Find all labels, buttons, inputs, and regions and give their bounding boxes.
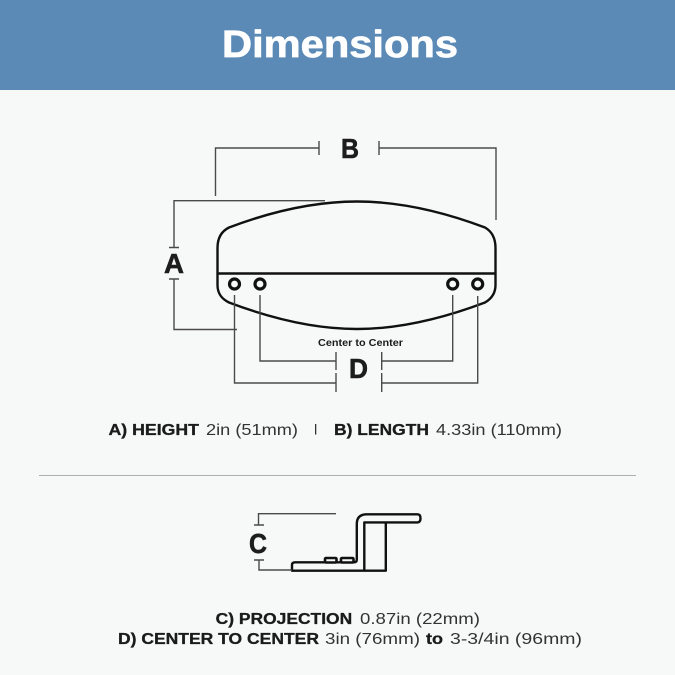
bracket front outline (218, 202, 496, 329)
front view diagram (164, 133, 496, 392)
center to center caption: Center to Center (318, 337, 403, 349)
center to center specification: 3-3/4in (96mm) (450, 631, 582, 648)
projection specification (216, 611, 480, 628)
projection specification: C) PROJECTION (216, 611, 352, 628)
projection specification: 0.87in (22mm) (360, 611, 480, 628)
height and length specifications: A) HEIGHT (108, 422, 200, 439)
dimension D: D (349, 353, 368, 384)
height and length specifications: 2in (51mm) (206, 422, 298, 439)
dimension C: C (249, 528, 267, 559)
side view diagram (249, 514, 420, 571)
fastener blocks (325, 558, 354, 562)
dimension A: A (164, 248, 184, 279)
height and length specifications (108, 422, 562, 439)
center to center specification: D) CENTER TO CENTER (118, 631, 319, 648)
bracket side profile (292, 514, 420, 571)
title: Dimensions (222, 24, 458, 66)
height and length specifications: 4.33in (110mm) (436, 422, 562, 439)
mounting holes (230, 279, 483, 289)
dimension C (249, 514, 336, 570)
center to center specification: 3in (76mm) (325, 631, 420, 648)
dimension B (216, 133, 496, 220)
center to center specification: to (426, 631, 443, 648)
dimension A (164, 201, 325, 330)
height and length specifications: B) LENGTH (334, 422, 429, 439)
center to center specification (118, 631, 582, 648)
dimension D (234, 295, 478, 392)
header banner (0, 0, 675, 90)
dimension B: B (341, 133, 359, 164)
